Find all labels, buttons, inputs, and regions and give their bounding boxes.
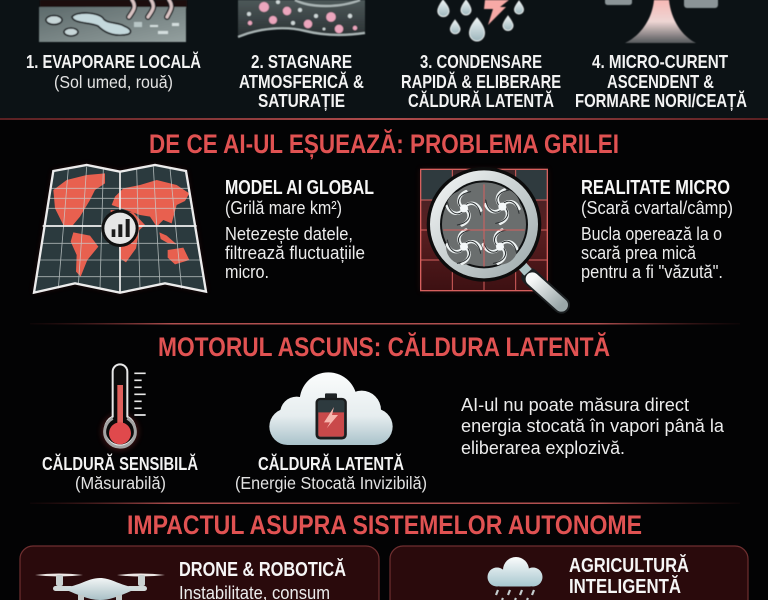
- step 2 text: SATURAȚIE: [258, 91, 345, 111]
- step 3 text: RAPIDĂ & ELIBERARE: [401, 71, 561, 92]
- text: global model: MODEL AI GLOBAL: [225, 177, 374, 199]
- icon: condensation drops and lightning: [438, 0, 524, 41]
- text: global model: filtrează fluctuațiile: [225, 242, 365, 263]
- text: agriculture: INTELIGENTĂ: [569, 575, 681, 598]
- icon: drone: [35, 574, 165, 600]
- heading: autonomous systems impact: IMPACTUL ASUPRA SISTEMELOR AUTONOME: [127, 510, 642, 540]
- text: micro reality: REALITATE MICRO: [581, 177, 730, 199]
- step 2 text: ATMOSFERICĂ &: [239, 71, 364, 92]
- step 3 text: 3. CONDENSARE: [420, 52, 542, 72]
- text: latent heat: (Energie Stocată Invizibilă): [235, 473, 427, 493]
- text: global model: [225, 177, 374, 282]
- text: agriculture: AGRICULTURĂ: [569, 554, 689, 577]
- text: micro reality: Bucla operează la o: [581, 223, 722, 244]
- text: agriculture: [569, 554, 689, 598]
- panel: global AI model: [34, 165, 374, 293]
- text: sensible heat: (Măsurabilă): [75, 473, 166, 493]
- panel: smart agriculture: [390, 546, 748, 600]
- text: micro reality: [581, 177, 733, 282]
- text: sensible heat: [42, 453, 198, 493]
- heading: grid problem: DE CE AI-UL EȘUEAZĂ: PROBLEMA GRILEI: [149, 128, 619, 159]
- text: latent heat: CĂLDURĂ LATENTĂ: [258, 453, 404, 474]
- step 4 text: ASCENDENT &: [607, 72, 714, 92]
- heading: hidden engine: MOTORUL ASCUNS: CĂLDURA LATENTĂ: [158, 331, 610, 362]
- text: global model: (Grilă mare km²): [225, 197, 342, 218]
- text: AI limits: [461, 394, 725, 458]
- step 2 text: 2. STAGNARE: [251, 52, 352, 72]
- text: latent heat: [235, 453, 427, 493]
- text: global model: Netezește datele,: [225, 223, 353, 244]
- text: AI limits: eliberarea explozivă.: [461, 437, 625, 458]
- panel: micro reality: [421, 167, 733, 305]
- panel: latent heat: [235, 372, 427, 493]
- icon: rain cloud: [488, 557, 542, 600]
- step 3 text: [401, 52, 561, 111]
- icon: cloud with battery: [269, 372, 393, 445]
- icon: rising micro-current: [605, 0, 718, 43]
- text: micro reality: scară prea mică: [581, 242, 697, 263]
- icon: evaporating ground: [39, 0, 187, 42]
- text: micro reality: (Scară cvartal/câmp): [581, 197, 733, 218]
- step 1 text: (Sol umed, rouă): [54, 72, 173, 92]
- text: AI limits: energia stocată în vapori până la: [461, 415, 725, 436]
- panel: sensible heat: [42, 364, 198, 493]
- icon: data marker: [101, 210, 139, 247]
- icon: stagnant saturated air: [238, 0, 365, 37]
- icon: thermometer: [102, 364, 146, 450]
- text: micro reality: pentru a fi "văzută".: [581, 261, 723, 282]
- panel: drones and robotics: [20, 546, 379, 600]
- step 4 text: [575, 52, 747, 111]
- step 1 text: [26, 51, 201, 92]
- text: drones: [179, 558, 346, 600]
- step 3 text: CĂLDURĂ LATENTĂ: [408, 90, 554, 111]
- text: AI limits: AI-ul nu poate măsura direct: [461, 394, 689, 415]
- icon: world map with grid: [34, 165, 206, 293]
- step 2 text: [239, 52, 364, 111]
- icon: magnifier over grid: [421, 167, 561, 305]
- text: drones: DRONE & ROBOTICĂ: [179, 558, 346, 581]
- step 1 text: 1. EVAPORARE LOCALĂ: [26, 51, 201, 72]
- panel: process steps: [0, 0, 768, 120]
- text: sensible heat: CĂLDURĂ SENSIBILĂ: [42, 453, 198, 474]
- text: global model: micro.: [225, 261, 269, 282]
- step 4 text: 4. MICRO-CURENT: [592, 52, 728, 72]
